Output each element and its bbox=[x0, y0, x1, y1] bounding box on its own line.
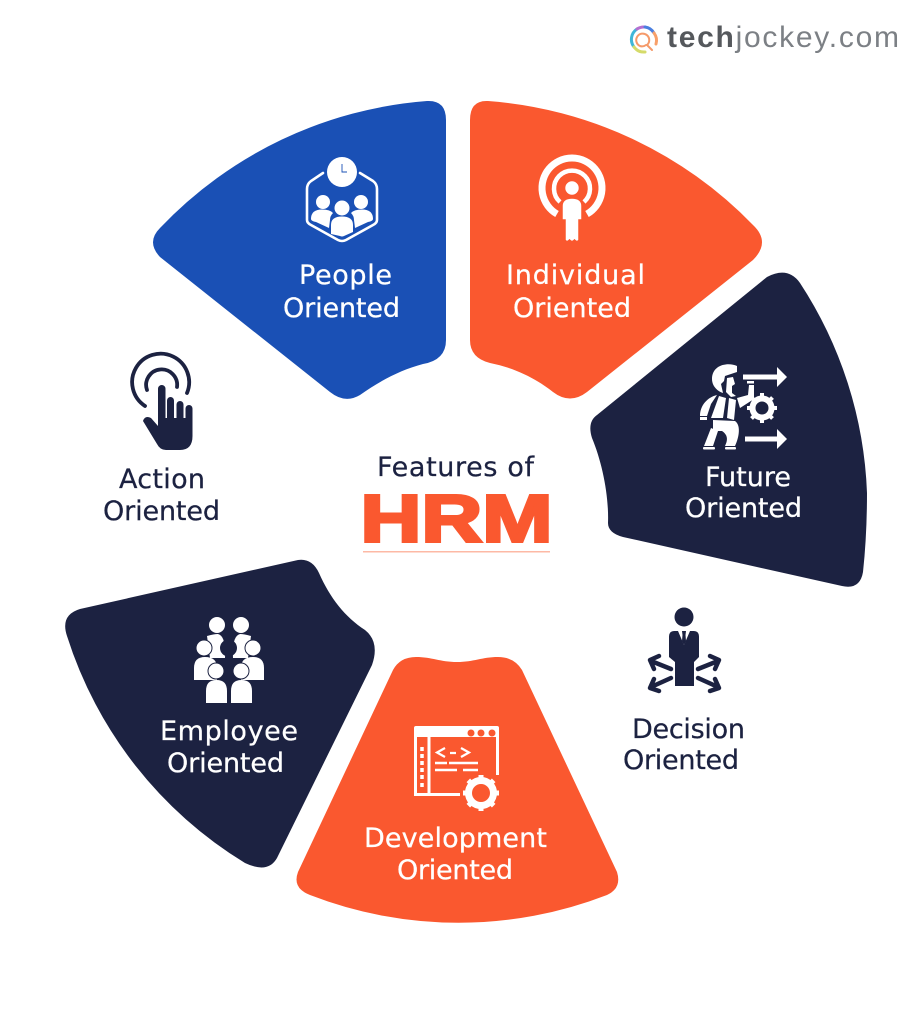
icon: group of people bbox=[194, 617, 264, 703]
icon: people with clock bbox=[307, 157, 377, 241]
panel: Individual Oriented bbox=[470, 101, 762, 398]
item: Decision Oriented bbox=[623, 608, 745, 776]
heading: Features of: Features of bbox=[377, 452, 535, 483]
label: Decision Oriented: Oriented bbox=[623, 745, 739, 776]
label: Future Oriented: Oriented bbox=[685, 493, 802, 524]
label: Individual Oriented: Oriented bbox=[513, 293, 631, 324]
label: Individual Oriented: Individual bbox=[506, 260, 645, 291]
icon: logo swirl bbox=[631, 27, 656, 52]
icon: person broadcast bbox=[542, 158, 602, 242]
label: Action Oriented: Oriented bbox=[103, 496, 220, 527]
center title: Features of HRM bbox=[360, 452, 552, 556]
label: Future Oriented: Future bbox=[705, 462, 791, 493]
item: Action Oriented bbox=[103, 354, 220, 527]
label: Development Oriented: Development bbox=[364, 823, 547, 854]
panel: Employee Oriented bbox=[65, 560, 375, 867]
icon: businessman with arrows bbox=[650, 608, 719, 691]
label: Employee Oriented: Oriented bbox=[167, 748, 284, 779]
panel shape: employee bbox=[65, 560, 375, 867]
panel shape: future bbox=[590, 273, 867, 587]
panel: Future Oriented bbox=[590, 273, 867, 587]
label: Action Oriented: Action bbox=[119, 464, 205, 495]
label: Decision Oriented: Decision bbox=[632, 714, 745, 745]
logo: techjockey.com bbox=[631, 21, 899, 54]
title underline bbox=[363, 551, 550, 552]
heading: HRM: HRM bbox=[360, 482, 552, 556]
label: Employee Oriented: Employee bbox=[160, 716, 298, 747]
icon: man with gear and arrows bbox=[700, 364, 787, 450]
icon: code window with gear bbox=[414, 726, 499, 811]
label: People Oriented: Oriented bbox=[283, 293, 400, 324]
label: Development Oriented: Oriented bbox=[397, 855, 513, 886]
logo wordmark: techjockey.com bbox=[667, 21, 899, 54]
panel shape: individual bbox=[470, 101, 762, 398]
panel: Development Oriented bbox=[296, 657, 618, 923]
panel: People Oriented bbox=[153, 101, 446, 399]
label: People Oriented: People bbox=[299, 260, 392, 291]
panel shape: people bbox=[153, 101, 446, 399]
icon: hand tapping bbox=[132, 354, 192, 450]
panel shape: development bbox=[296, 657, 618, 923]
